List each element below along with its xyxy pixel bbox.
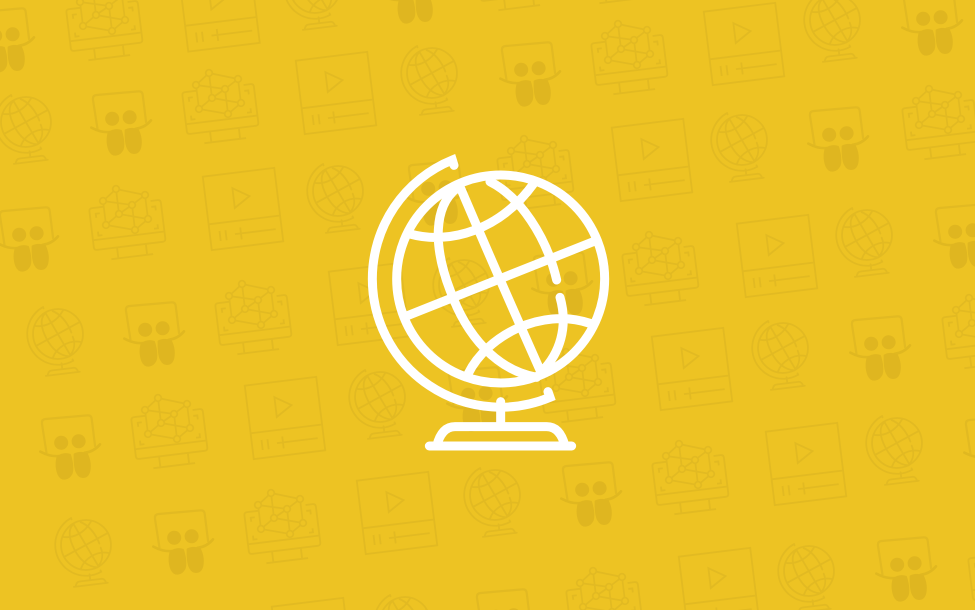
- icon: slideshare: [473, 588, 538, 610]
- icon: monitor network: [566, 568, 644, 610]
- icon: small globe: [52, 514, 116, 589]
- icon: small globe: [281, 0, 345, 32]
- icon: monitor network: [539, 349, 617, 424]
- icon: small globe: [461, 464, 525, 539]
- icon: video player: [329, 263, 409, 345]
- icon: slideshare: [445, 366, 510, 433]
- icon: slideshare: [122, 301, 187, 368]
- stand post: [487, 402, 514, 425]
- icon: small globe: [398, 42, 462, 117]
- icon: slideshare: [559, 461, 624, 528]
- icon: monitor network: [66, 0, 144, 62]
- icon: small globe: [371, 591, 435, 610]
- icon: small globe: [775, 540, 839, 610]
- icon: video player: [737, 215, 817, 297]
- icon: monitor network: [182, 70, 260, 145]
- icon: monitor network: [215, 281, 293, 356]
- icon: slideshare: [848, 315, 913, 382]
- icon: small globe: [430, 254, 494, 329]
- icon: monitor network: [476, 0, 554, 12]
- icon: small globe: [833, 204, 897, 279]
- icon: small globe: [708, 109, 772, 184]
- icon: monitor network: [131, 395, 209, 470]
- icon: small globe: [24, 303, 88, 378]
- icon: slideshare: [151, 509, 216, 576]
- icon: monitor network: [968, 536, 975, 610]
- icon: monitor network: [89, 186, 167, 261]
- icon: small globe: [863, 412, 927, 487]
- icon: monitor network: [622, 232, 700, 307]
- icon: slideshare: [874, 536, 939, 603]
- icon: small globe: [801, 0, 865, 64]
- icon: video player: [272, 598, 352, 610]
- icon: video player: [704, 3, 784, 85]
- icon: video player: [766, 423, 846, 505]
- icon: large white desk globe: [372, 160, 605, 446]
- icon: video player: [179, 0, 260, 52]
- icon: video player: [245, 377, 325, 459]
- globe meridian arm: [372, 160, 550, 407]
- icon: slideshare: [0, 7, 37, 74]
- icon: slideshare: [932, 203, 975, 270]
- icon: slideshare: [0, 206, 61, 273]
- icon: small globe: [346, 366, 410, 441]
- icon: monitor network: [902, 86, 975, 161]
- icon: video player: [679, 548, 759, 610]
- icon: monitor network: [577, 0, 655, 5]
- latitude and longitude lines: [407, 182, 595, 377]
- icon: slideshare: [38, 414, 103, 481]
- icon: slideshare: [962, 415, 975, 482]
- icon: monitor network: [591, 21, 669, 96]
- icon: small globe: [0, 91, 56, 166]
- icon: slideshare: [498, 41, 563, 108]
- icon: monitor network: [652, 441, 730, 516]
- icon: small globe: [749, 317, 813, 392]
- icon: video player: [357, 472, 437, 554]
- icon: monitor network: [244, 490, 322, 565]
- icon: monitor network: [942, 295, 975, 370]
- icon: monitor network: [497, 136, 575, 211]
- icon: video player: [296, 52, 376, 134]
- icon: video player: [203, 168, 283, 250]
- icon: video player: [612, 119, 692, 201]
- icon: slideshare: [806, 106, 871, 173]
- icon: small globe: [304, 160, 368, 235]
- icon: slideshare: [530, 251, 595, 318]
- icon: video player: [652, 328, 732, 410]
- globe sphere outline: [397, 175, 605, 383]
- icon: slideshare: [405, 160, 470, 227]
- icon: slideshare: [380, 0, 445, 25]
- stand base: [429, 427, 572, 446]
- icon: slideshare: [89, 90, 154, 157]
- icon: slideshare: [900, 0, 965, 57]
